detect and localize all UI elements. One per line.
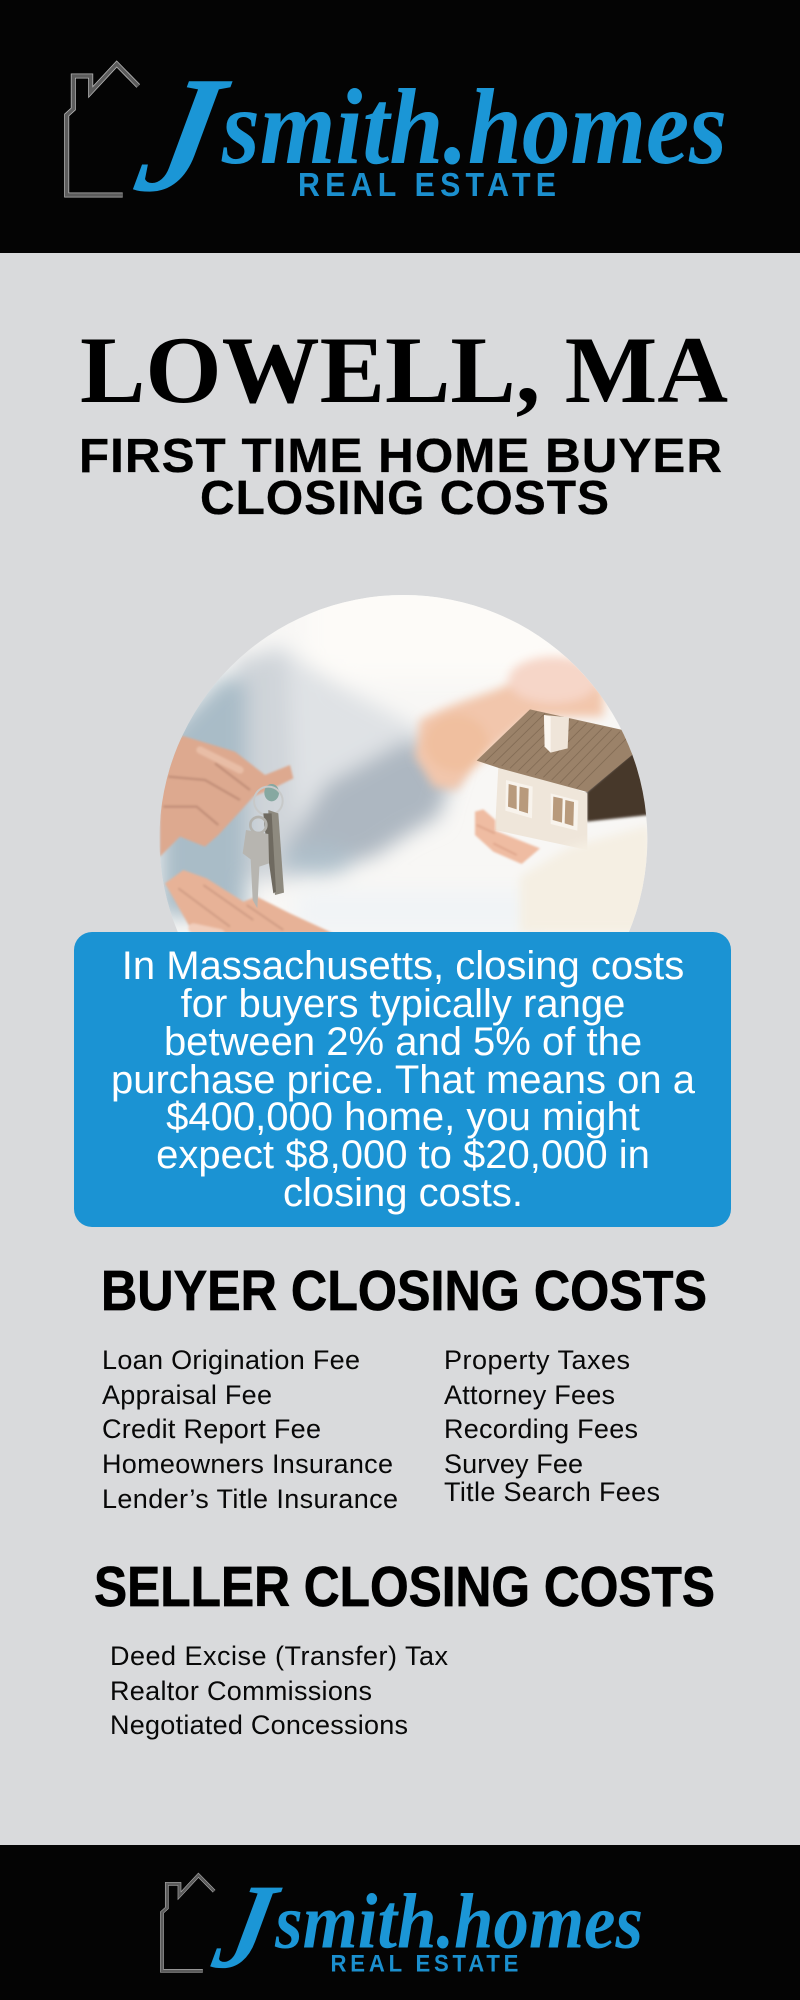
- blurred back hand: [415, 657, 603, 790]
- upper hand with keys: [160, 736, 293, 857]
- list: seller costs: Deed Excise (Transfer) Tax: [110, 1641, 448, 1671]
- photo: hands exchanging keys and a model house: [160, 595, 648, 932]
- heading: buyer closing costs: BUYER CLOSING COSTS: [101, 1259, 707, 1323]
- footer logo: [162, 1860, 643, 1994]
- blurred foreground cream object: [520, 827, 647, 932]
- list: buyer costs right column: Recording Fees: [444, 1414, 638, 1444]
- list: buyer costs left column: Lender’s Title Insurance: [102, 1484, 398, 1514]
- list: buyer costs right column: Title Search Fees: [444, 1477, 660, 1507]
- logo: Jsmith.homes Real Estate: [67, 44, 727, 227]
- list: buyer costs right column: Property Taxes: [444, 1345, 630, 1375]
- footer band: [0, 1845, 800, 2000]
- blurred person torso: [160, 595, 564, 929]
- subtitle: CLOSING COSTS: [200, 472, 610, 525]
- header band: [0, 0, 800, 253]
- model house: [477, 709, 648, 850]
- callout: closing cost range: purchase price. That means on a: [111, 1058, 696, 1102]
- list: buyer costs right column: [444, 1345, 660, 1507]
- callout: closing cost range: expect $8,000 to $20,000 in: [156, 1133, 650, 1177]
- lower open hand: [165, 870, 333, 934]
- list: seller costs: [110, 1641, 448, 1740]
- callout: closing cost range: closing costs.: [283, 1171, 523, 1215]
- list: buyer costs right column: Attorney Fees: [444, 1380, 615, 1410]
- list: buyer costs left column: Homeowners Insurance: [102, 1449, 393, 1479]
- list: seller costs: Realtor Commissions: [110, 1676, 372, 1706]
- callout: closing cost range: for buyers typically range: [181, 982, 625, 1026]
- callout: closing cost range: [74, 932, 731, 1227]
- list: buyer costs left column: Loan Origination Fee: [102, 1345, 360, 1375]
- key ring and keys: [243, 787, 284, 908]
- list: buyer costs right column: Survey Fee: [444, 1449, 583, 1479]
- list: buyer costs left column: Credit Report Fee: [102, 1414, 321, 1444]
- callout: closing cost range: between 2% and 5% of the: [164, 1020, 642, 1064]
- callout: closing cost range: In Massachusetts, closing costs: [122, 944, 684, 988]
- list: buyer costs left column: [102, 1345, 398, 1514]
- subtitle: [79, 430, 723, 525]
- list: seller costs: Negotiated Concessions: [110, 1710, 408, 1740]
- heading: seller closing costs: SELLER CLOSING COSTS: [94, 1555, 715, 1619]
- hand under the house: [475, 809, 540, 864]
- subtitle: FIRST TIME HOME BUYER: [79, 430, 723, 483]
- callout: closing cost range: $400,000 home, you might: [166, 1095, 640, 1139]
- title: Lowell, MA: LOWELL, MA: [80, 317, 728, 423]
- list: buyer costs left column: Appraisal Fee: [102, 1380, 272, 1410]
